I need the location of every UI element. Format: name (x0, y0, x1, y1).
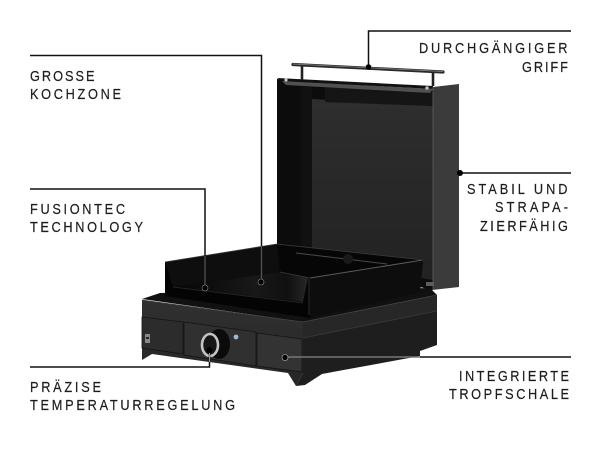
front panel left (142, 317, 183, 354)
lid (277, 64, 459, 291)
griddle right wall (310, 260, 423, 318)
callout: durchgängiger griff (366, 31, 571, 75)
callout: präzise temperaturregelung: PRÄZISE (30, 378, 101, 395)
callout: integrierte tropfschale: TROPFSCHALE (449, 385, 569, 402)
callout: integrierte tropfschale: INTEGRIERTE (459, 367, 569, 384)
griddle cooking surface (173, 272, 308, 302)
callout: durchgängiger griff: GRIFF (522, 58, 568, 75)
handle (293, 64, 443, 86)
base front (142, 300, 303, 386)
drip tray drawer (257, 333, 302, 372)
callout: fusiontec technology (30, 189, 208, 291)
callout: stabil und strapazierfähig: STABIL UND (467, 180, 567, 197)
lid top rim (282, 81, 433, 93)
griddle silhouette (165, 244, 423, 318)
callout: präzise temperaturregelung: TEMPERATURREGELUNG (30, 396, 235, 413)
base top (142, 288, 437, 322)
callout: durchgängiger griff: DURCHGÄNGIGER (419, 39, 567, 56)
brand mark (145, 334, 150, 343)
lid side panel (423, 84, 459, 291)
callout: grosse kochzone (30, 56, 264, 285)
callout: fusiontec technology: FUSIONTEC (30, 200, 125, 217)
callout: grosse kochzone: GROSSE (30, 67, 95, 84)
callout: grosse kochzone: KOCHZONE (30, 85, 121, 102)
front panel centre (184, 322, 256, 366)
callout: präzise temperaturregelung (30, 347, 235, 413)
callout: stabil und strapazierfähig: ZIERFÄHIG (480, 217, 568, 234)
temperature knob (202, 329, 238, 359)
lid interior frame (277, 79, 433, 290)
griddle plate (165, 244, 423, 318)
griddle left back wall (165, 244, 280, 287)
callout: integrierte tropfschale (282, 354, 571, 402)
lid inner panel (312, 99, 433, 280)
base right side (296, 295, 437, 386)
griddle right back wall and rim (277, 244, 423, 278)
callout: stabil und strapazierfähig (457, 170, 571, 234)
callout: fusiontec technology: TECHNOLOGY (30, 218, 143, 235)
callout: stabil und strapazierfähig: STRAPA- (495, 198, 568, 215)
base unit (142, 288, 437, 386)
